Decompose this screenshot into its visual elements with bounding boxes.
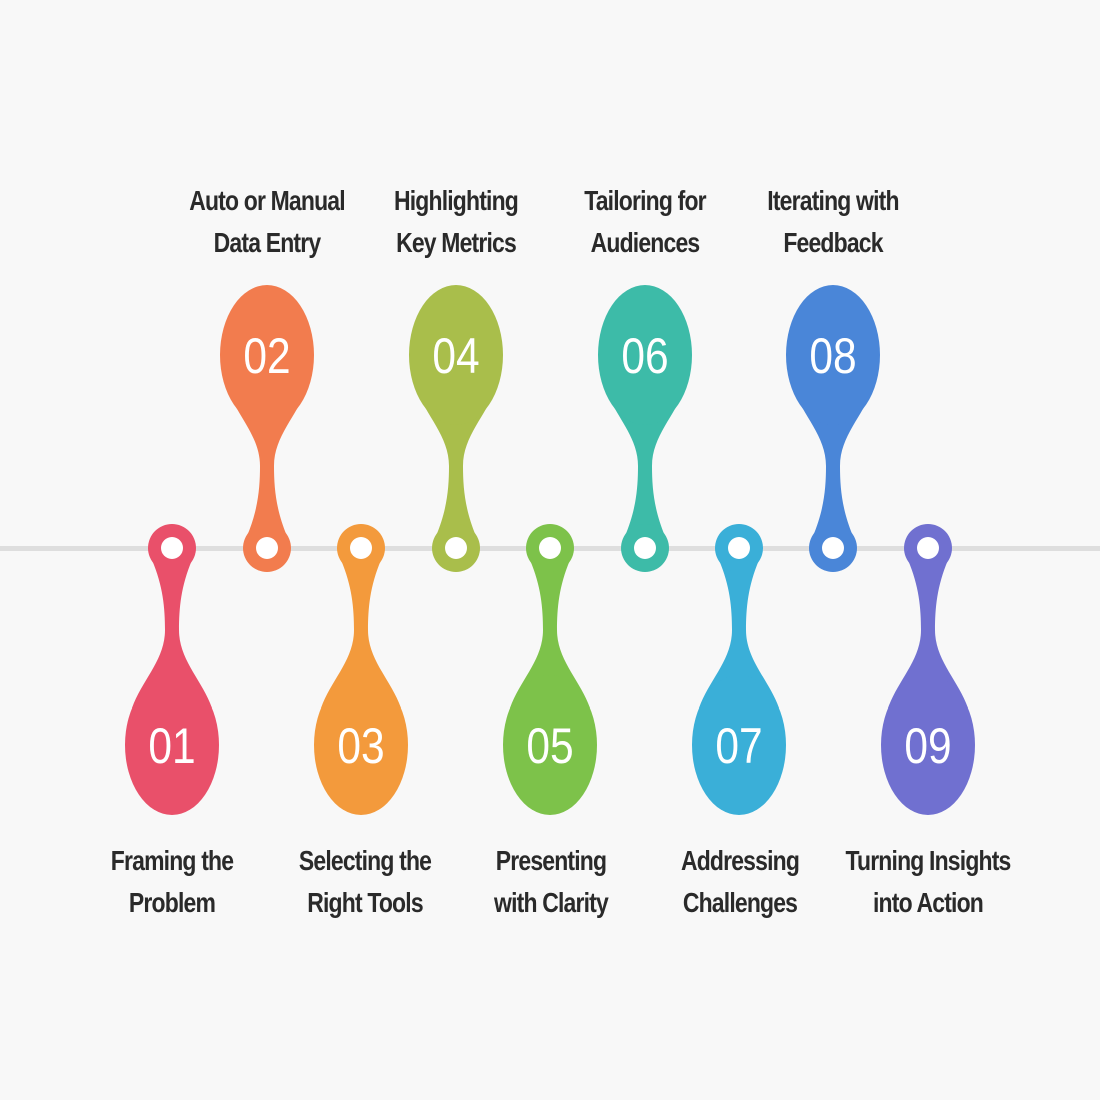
label 05 xyxy=(494,845,609,918)
label 01 xyxy=(111,845,234,918)
pin 04 xyxy=(409,285,503,572)
pin 01: 01 xyxy=(148,718,196,774)
label 05: Presenting xyxy=(496,845,606,876)
label 09: Turning Insights xyxy=(845,845,1010,876)
pin 02 xyxy=(220,285,314,572)
label 04: Key Metrics xyxy=(396,227,516,258)
horizontal axis line xyxy=(0,546,1100,551)
pin 01 xyxy=(125,524,219,815)
label 06: Audiences xyxy=(591,227,699,258)
pin 09 xyxy=(881,524,975,815)
pin 02: 02 xyxy=(243,328,291,384)
label 06 xyxy=(584,185,706,258)
pin 07 xyxy=(692,524,786,815)
label 08 xyxy=(767,185,899,258)
label 03: Right Tools xyxy=(307,887,423,918)
label 07: Challenges xyxy=(683,887,797,918)
pin 05 xyxy=(503,524,597,815)
pin 08: 08 xyxy=(809,328,857,384)
label 07: Addressing xyxy=(681,845,799,876)
label 02: Data Entry xyxy=(214,227,320,258)
label 01: Problem xyxy=(129,887,215,918)
label 07 xyxy=(681,845,799,918)
label 08: Iterating with xyxy=(767,185,899,216)
label 09: into Action xyxy=(873,887,983,918)
label 04: Highlighting xyxy=(394,185,518,216)
pin 09: 09 xyxy=(904,718,952,774)
label 02: Auto or Manual xyxy=(189,185,345,216)
label 03: Selecting the xyxy=(299,845,431,876)
label 04 xyxy=(394,185,518,258)
pin 03: 03 xyxy=(337,718,385,774)
pin 06: 06 xyxy=(621,328,669,384)
label 09 xyxy=(845,845,1010,918)
label 02 xyxy=(189,185,345,258)
pin 07: 07 xyxy=(715,718,763,774)
pin 08 xyxy=(786,285,880,572)
label 08: Feedback xyxy=(783,227,883,258)
pin 04: 04 xyxy=(432,328,480,384)
label 01: Framing the xyxy=(111,845,233,876)
label 05: with Clarity xyxy=(494,887,608,918)
pin 06 xyxy=(598,285,692,572)
pin 03 xyxy=(314,524,408,815)
label 06: Tailoring for xyxy=(584,185,706,216)
pin 05: 05 xyxy=(526,718,574,774)
label 03 xyxy=(299,845,432,918)
